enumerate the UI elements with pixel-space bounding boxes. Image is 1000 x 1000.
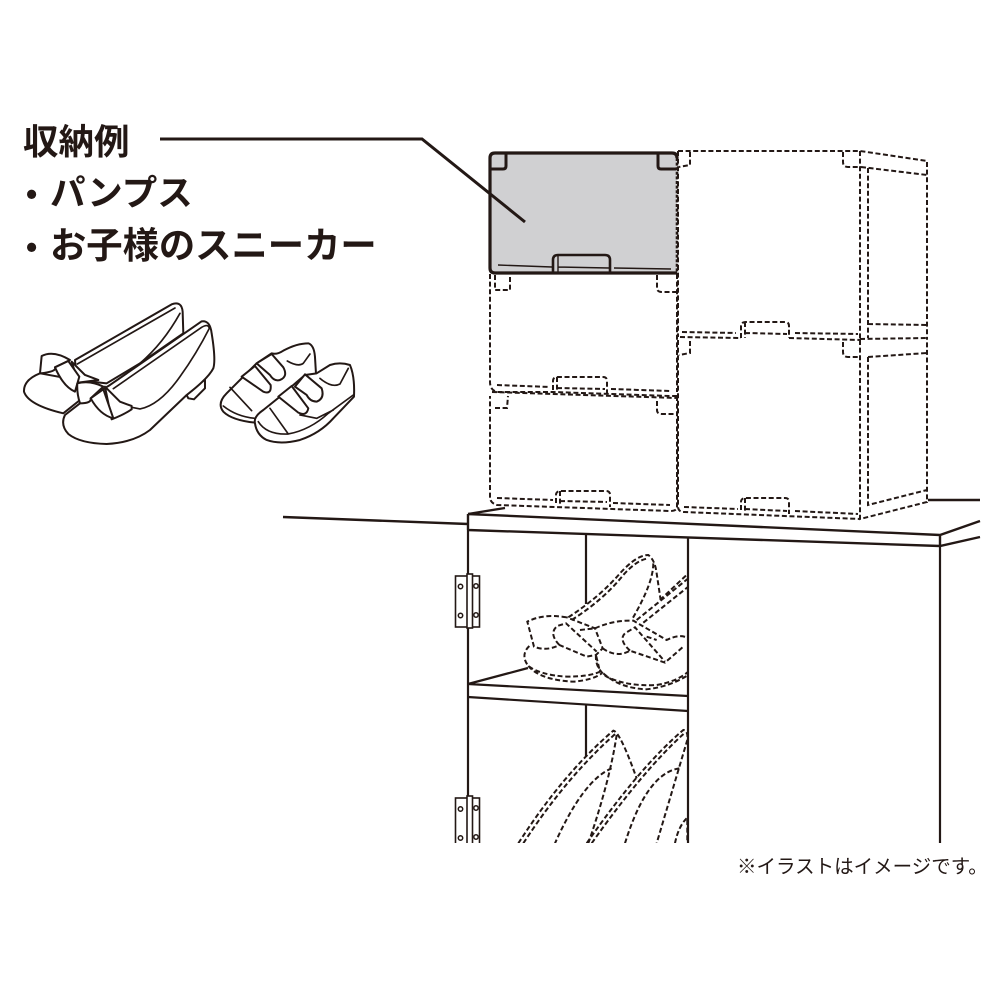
storage box: highlighted gray drawer (490, 153, 677, 273)
list item: children's sneakers: お子様のスニーカー (50, 225, 377, 266)
storage box: left middle dashed (490, 274, 677, 396)
leader line (160, 139, 525, 222)
dashed pumps on shelf (524, 555, 688, 689)
storage box: left bottom dashed (490, 392, 677, 511)
caption: ※イラストはイメージです。 (737, 856, 988, 878)
hinge lower (456, 796, 480, 850)
list item: pumps: • (26, 176, 37, 212)
cabinet top board (283, 500, 980, 546)
storage box: right top dashed (678, 151, 927, 340)
icon: pumps (24, 303, 214, 444)
list item: pumps: パンプス (50, 173, 193, 213)
storage box: right bottom dashed (678, 338, 927, 519)
list item: children's sneakers: • (26, 229, 37, 265)
cabinet (283, 500, 980, 850)
cabinet shelf (468, 668, 688, 711)
cabinet frame (468, 530, 940, 843)
dashed heels on lower shelf (518, 730, 687, 843)
heading: storage example: 収納例 (23, 122, 130, 162)
icon: children's sneakers (221, 343, 354, 442)
hinge upper (456, 574, 480, 628)
